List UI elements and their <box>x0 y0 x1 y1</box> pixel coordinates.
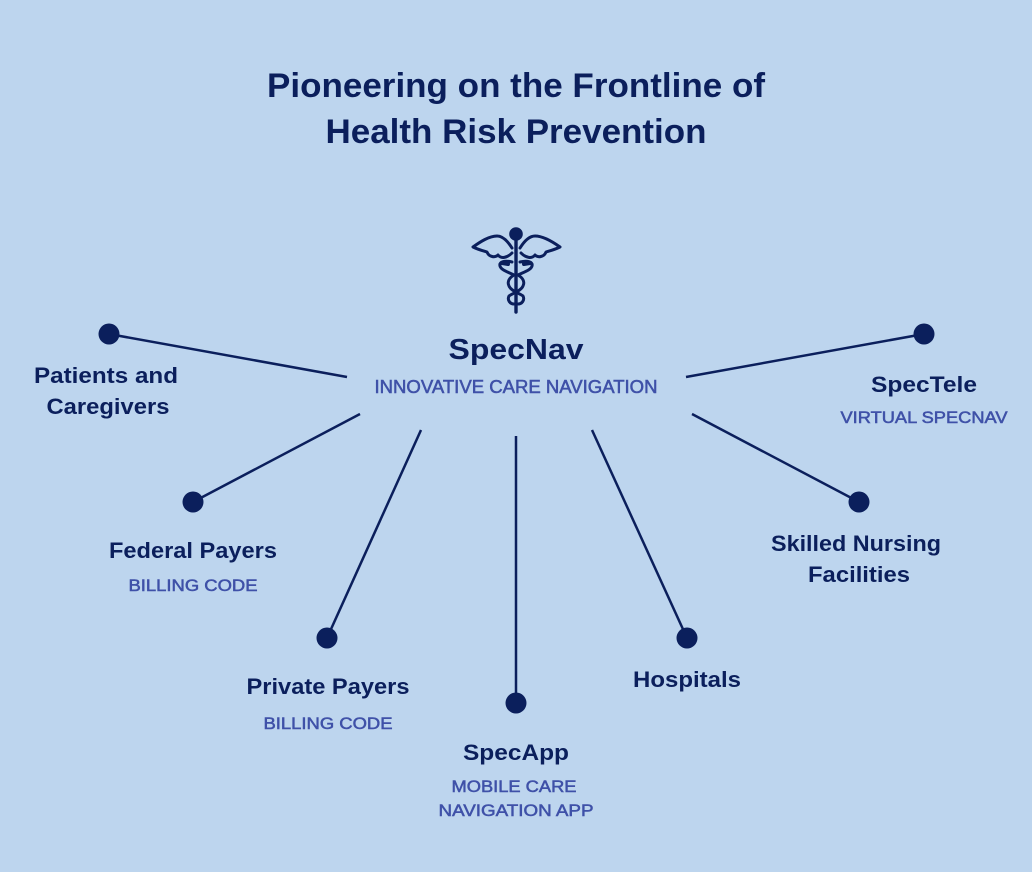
center label: SpecNav: INNOVATIVE CARE NAVIGATION <box>374 377 658 397</box>
center label: SpecNav: SpecNav <box>448 334 584 366</box>
connector: Private Payers <box>316 430 421 648</box>
label: Federal Payers: BILLING CODE <box>128 576 258 595</box>
label: SpecTele <box>840 372 1008 427</box>
label: SpecApp: SpecApp <box>463 740 569 765</box>
connector: Patients and Caregivers <box>98 324 347 377</box>
label: Federal Payers <box>109 538 277 595</box>
label: Patients and Caregivers <box>34 363 178 419</box>
icon: caduceus <box>473 227 560 312</box>
label: Federal Payers: Federal Payers <box>109 538 277 563</box>
label: SpecApp: NAVIGATION APP <box>438 801 594 820</box>
label: Private Payers <box>246 674 410 733</box>
label: Patients and Caregivers: Caregivers <box>46 394 170 419</box>
connector: Hospitals <box>592 430 698 648</box>
title: Pioneering on the Frontline of <box>267 67 766 105</box>
title: Health Risk Prevention <box>326 113 706 151</box>
connector: Skilled Nursing Facilities <box>692 414 870 512</box>
label: Skilled Nursing Facilities: Skilled Nursing <box>771 531 941 556</box>
label: SpecTele: SpecTele <box>871 372 977 397</box>
label: Private Payers: BILLING CODE <box>264 714 392 733</box>
label: Skilled Nursing Facilities: Facilities <box>808 562 910 587</box>
title <box>267 67 766 151</box>
label: Private Payers: Private Payers <box>246 674 410 699</box>
label: Hospitals: Hospitals <box>633 667 741 692</box>
label: SpecTele: VIRTUAL SPECNAV <box>840 408 1008 427</box>
connector: Federal Payers <box>182 414 360 512</box>
center label: SpecNav <box>374 334 658 397</box>
label: SpecApp <box>438 740 594 820</box>
label: Skilled Nursing Facilities <box>771 531 941 587</box>
label: Patients and Caregivers: Patients and <box>34 363 178 388</box>
connector: SpecApp <box>506 436 526 714</box>
connector: SpecTele <box>686 324 934 377</box>
label: SpecApp: MOBILE CARE <box>452 777 576 796</box>
